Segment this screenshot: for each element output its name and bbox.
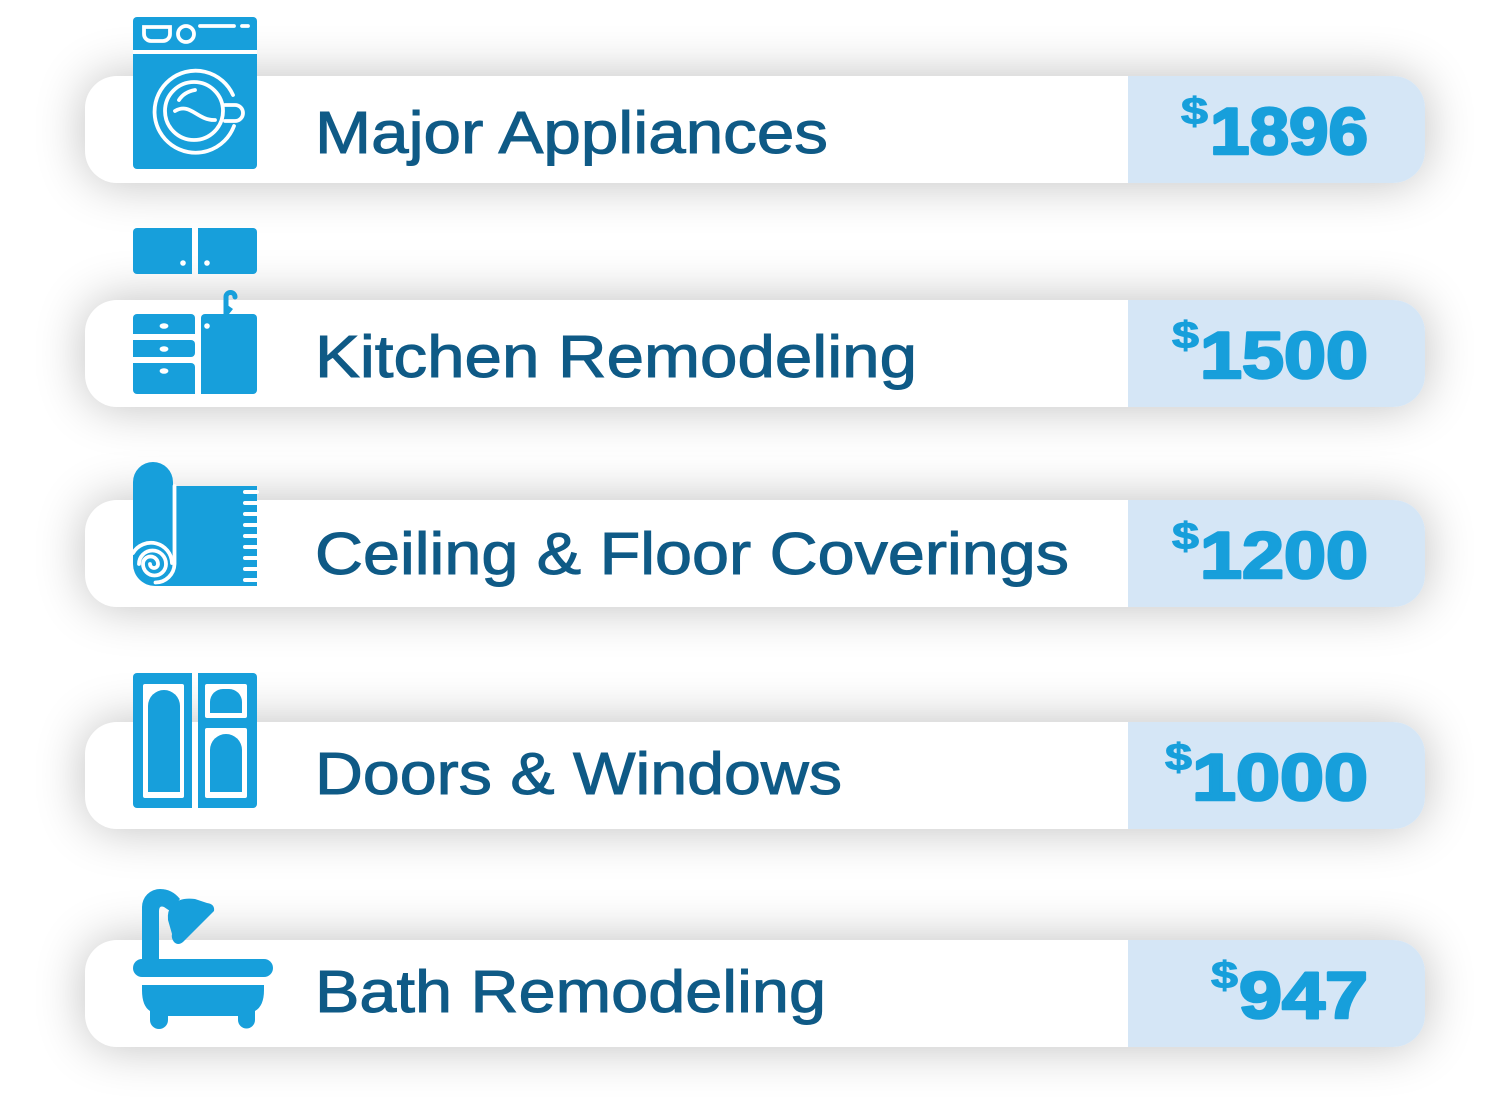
row card shadow [85, 940, 1425, 1047]
price: 1896 [1210, 94, 1368, 168]
row card shadow [85, 76, 1425, 183]
price panel [1128, 300, 1425, 407]
label: Ceiling & Floor Coverings [315, 521, 1069, 587]
price: 1200 [1200, 518, 1368, 592]
price panel [1128, 940, 1425, 1047]
icon: bathtub and shower [133, 889, 273, 1029]
row card [85, 76, 1425, 183]
price [1165, 737, 1368, 814]
price: $ [1172, 315, 1199, 357]
row card shadow [85, 500, 1425, 607]
price: $ [1181, 91, 1208, 133]
price panel [1128, 722, 1425, 829]
price [1211, 955, 1368, 1032]
icon: washing machine [133, 17, 257, 169]
icon: rolled carpet [133, 462, 257, 586]
icon: kitchen cabinets [133, 228, 257, 394]
price: $ [1165, 737, 1192, 779]
price panel [1128, 500, 1425, 607]
price: $ [1172, 516, 1199, 558]
label: Major Appliances [315, 100, 828, 166]
label: Bath Remodeling [315, 959, 826, 1025]
row card [85, 500, 1425, 607]
row card shadow [85, 300, 1425, 407]
row: Ceiling & Floor Coverings [85, 462, 1425, 607]
price: 1000 [1192, 740, 1368, 814]
price: 1500 [1200, 318, 1368, 392]
row: Major Appliances [85, 17, 1425, 183]
price: $ [1211, 955, 1238, 997]
label: Kitchen Remodeling [315, 324, 917, 390]
price: 947 [1239, 958, 1368, 1032]
row: Kitchen Remodeling [85, 228, 1425, 407]
row: Bath Remodeling [85, 889, 1425, 1047]
row card [85, 300, 1425, 407]
row card [85, 940, 1425, 1047]
row card shadow [85, 722, 1425, 829]
label: Doors & Windows [315, 741, 842, 807]
price panel [1128, 76, 1425, 183]
icon: doors and windows [133, 673, 257, 808]
row: Doors & Windows [85, 673, 1425, 829]
row card [85, 722, 1425, 829]
